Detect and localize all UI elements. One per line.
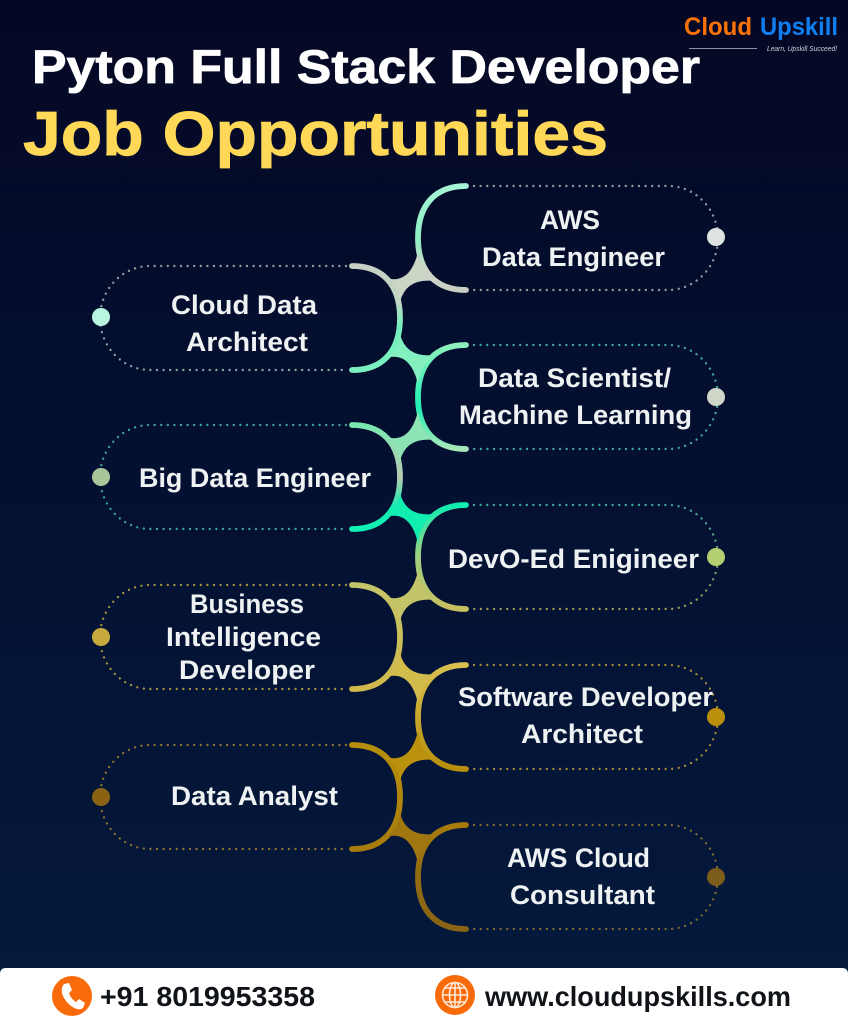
item: Software Developer Architect: Software Developer — [458, 682, 713, 712]
item: AWS Data Engineer: AWS — [540, 205, 600, 235]
item: Cloud Data Architect — [92, 266, 346, 370]
title — [23, 40, 700, 169]
logo: Upskill — [760, 13, 838, 41]
footer bar — [0, 968, 848, 1024]
title: Pyton Full Stack Developer — [32, 40, 700, 93]
icon: phone — [52, 976, 92, 1016]
item: Big Data Engineer — [92, 425, 371, 529]
item: Big Data Engineer: Big Data Engineer — [139, 463, 371, 493]
item: AWS Cloud Consultant: Consultant — [510, 880, 655, 910]
item: Cloud Data Architect: Cloud Data — [171, 290, 318, 320]
item: Business Intelligence Developer: Intelligence — [166, 622, 321, 652]
item: Software Developer Architect: Architect — [521, 719, 643, 749]
item: AWS Cloud Consultant — [474, 825, 725, 929]
item: Data Scientist / Machine Learning: Data Scientist/ — [478, 363, 672, 393]
phone number: +91 8019953358 — [100, 981, 315, 1012]
logo: Learn, Upskill Succeed! — [767, 44, 838, 53]
item: Business Intelligence Developer: Business — [190, 589, 304, 619]
item: Data Analyst — [92, 745, 346, 849]
item: Business Intelligence Developer: Developer — [179, 655, 316, 685]
icon: globe — [435, 975, 475, 1015]
item: Data Analyst: Data Analyst — [171, 781, 338, 811]
item: AWS Cloud Consultant: AWS Cloud — [507, 843, 650, 873]
item: AWS Data Engineer: Data Engineer — [482, 242, 665, 272]
website: www.cloudupskills.com — [484, 981, 791, 1012]
item: DevO-Ed Enigineer — [448, 505, 725, 609]
item: Business Intelligence Developer — [92, 585, 346, 689]
item: Cloud Data Architect: Architect — [186, 327, 308, 357]
title: Job Opportunities — [23, 100, 608, 169]
logo — [684, 13, 838, 53]
item: Software Developer Architect — [458, 665, 725, 769]
item: Data Scientist / Machine Learning: Machine Learning — [459, 400, 692, 430]
item: DevO-Ed Enigineer: DevO-Ed Enigineer — [448, 544, 699, 574]
logo: Cloud — [684, 13, 752, 41]
item: Data Scientist / Machine Learning — [459, 345, 725, 449]
connector spine — [352, 186, 466, 929]
item: AWS Data Engineer — [474, 186, 725, 290]
